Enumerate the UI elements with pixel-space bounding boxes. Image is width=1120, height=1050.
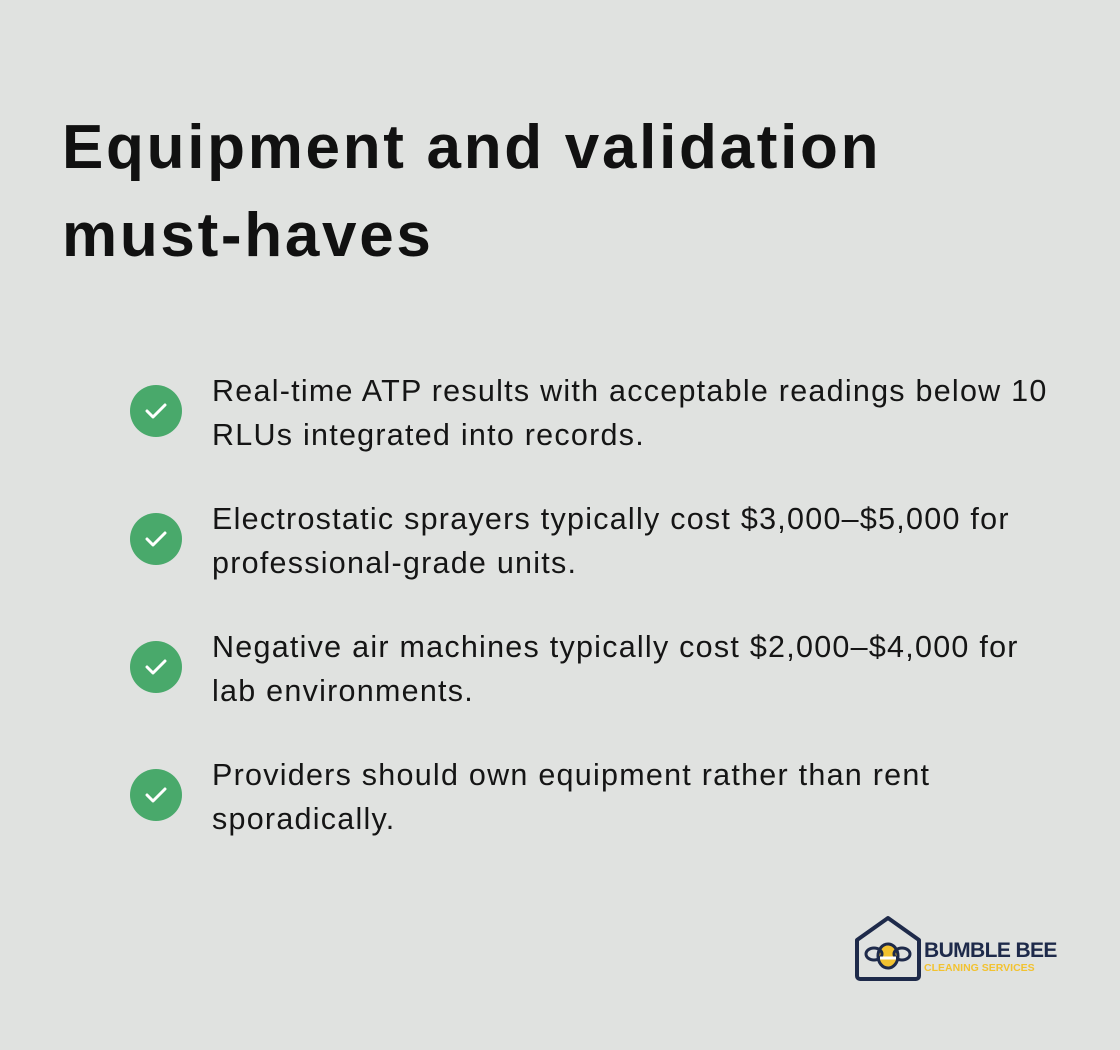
title — [62, 113, 881, 270]
item 3 — [130, 630, 1019, 708]
text: RLUs integrated into records. — [212, 418, 645, 452]
item 1 — [130, 374, 1048, 452]
icon: check — [130, 385, 182, 437]
logo text: CLEANING SERVICES — [924, 962, 1035, 974]
text: Electrostatic sprayers typically cost $3,000–$5,000 for — [212, 502, 1010, 536]
title: must-haves — [62, 201, 434, 270]
logo text: BUMBLE BEE — [924, 939, 1057, 962]
title: Equipment and validation — [62, 113, 881, 182]
text: Providers should own equipment rather than rent — [212, 758, 930, 792]
icon: bee house — [855, 916, 921, 981]
logo text — [924, 939, 1057, 974]
logo — [855, 916, 1057, 981]
text — [212, 758, 930, 836]
text: sporadically. — [212, 802, 396, 836]
text — [212, 630, 1019, 708]
text: Real-time ATP results with acceptable readings below 10 — [212, 374, 1048, 408]
icon: check — [130, 769, 182, 821]
text — [212, 374, 1048, 452]
text: lab environments. — [212, 674, 474, 708]
icon: check — [130, 641, 182, 693]
text: Negative air machines typically cost $2,000–$4,000 for — [212, 630, 1019, 664]
text — [212, 502, 1010, 580]
item 4 — [130, 758, 930, 836]
icon: check — [130, 513, 182, 565]
item 2 — [130, 502, 1010, 580]
text: professional-grade units. — [212, 546, 577, 580]
